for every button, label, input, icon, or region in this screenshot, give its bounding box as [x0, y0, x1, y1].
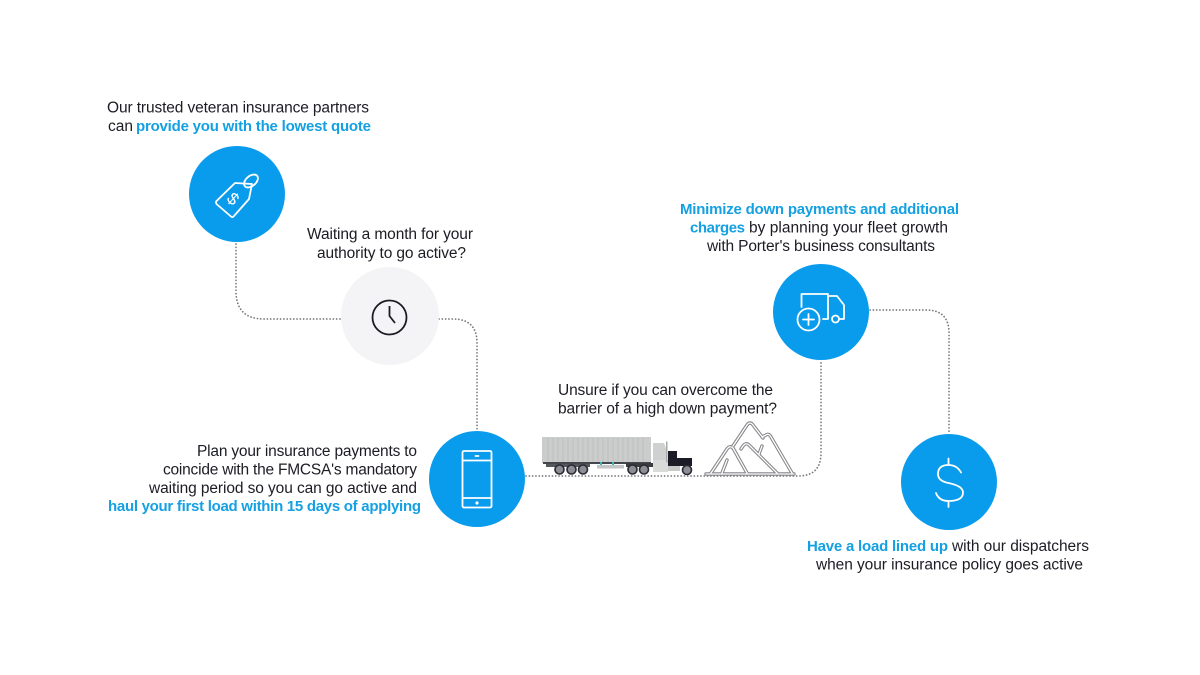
icon: dollar circle	[901, 434, 997, 530]
text block: lowest quote	[107, 100, 371, 135]
dotted connector: phone to truck circle	[526, 360, 821, 476]
icon: price tag circle: $	[223, 189, 243, 210]
text block: plan insurance payments: coincide with the FMCSA's mandatory	[163, 462, 417, 478]
text block: minimize down payments	[680, 201, 959, 255]
text block: minimize down payments: Minimize down payments and additional	[680, 201, 959, 218]
text block: plan insurance payments	[108, 443, 421, 515]
text block: load lined up: with our dispatchers	[951, 538, 1089, 555]
text block: lowest quote: Our trusted veteran insurance partners	[107, 100, 369, 116]
text block: waiting a month	[307, 226, 473, 262]
text block: minimize down payments: charges	[690, 220, 745, 236]
text block: lowest quote: provide you with the lowest quote	[136, 118, 371, 135]
text block: load lined up: Have a load lined up	[807, 538, 948, 555]
text block: plan insurance payments: Plan your insurance payments to	[197, 443, 417, 460]
text block: load lined up	[807, 538, 1089, 574]
icon: truck with plus circle	[773, 264, 869, 360]
text block: high down payment	[558, 382, 777, 418]
dotted connector: tag to clock	[236, 244, 341, 319]
text block: minimize down payments: by planning your fleet growth	[749, 220, 948, 236]
dotted connector: truck circle to dollar	[870, 310, 949, 434]
text block: lowest quote: can	[108, 118, 133, 135]
dotted connector: clock to phone	[439, 319, 477, 431]
icon: container truck	[542, 437, 692, 474]
text block: waiting a month: Waiting a month for your	[307, 226, 473, 243]
text block: plan insurance payments: haul your first load within 15 days of applying	[108, 498, 421, 515]
icon: price tag circle	[189, 146, 285, 242]
text block: waiting a month: authority to go active?	[317, 245, 466, 262]
text block: load lined up: when your insurance policy goes active	[815, 556, 1083, 574]
text block: high down payment: barrier of a high down payment?	[558, 400, 777, 418]
icon: mountain barrier	[706, 423, 794, 474]
icon: clock circle	[341, 267, 439, 365]
text block: minimize down payments: with Porter's business consultants	[706, 238, 935, 255]
icon: phone circle	[429, 431, 525, 527]
text block: high down payment: Unsure if you can overcome the	[558, 382, 773, 399]
text block: plan insurance payments: waiting period so you can go active and	[148, 480, 417, 497]
